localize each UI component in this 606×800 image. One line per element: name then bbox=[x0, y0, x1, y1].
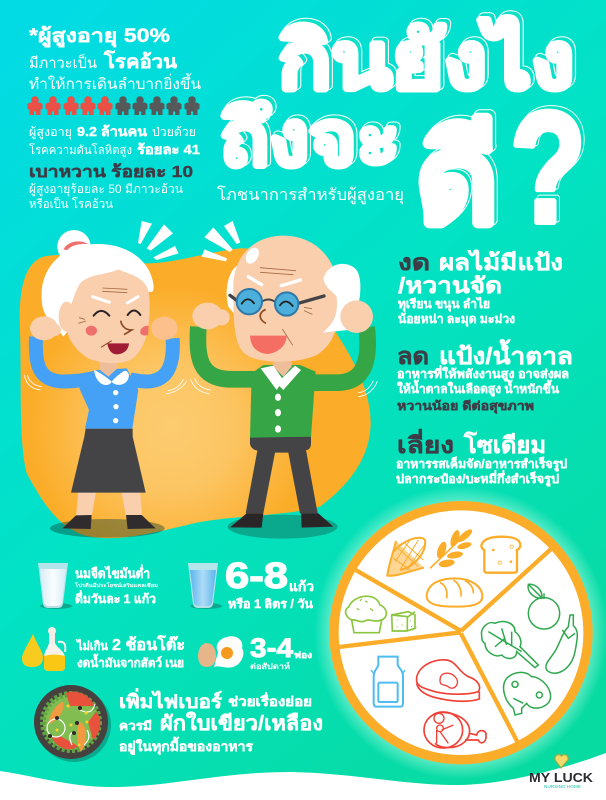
title: กินยังไง bbox=[278, 16, 574, 105]
milk text bbox=[74, 564, 158, 606]
icon: oil drop and bottle bbox=[22, 627, 65, 671]
fiber text: ควรมี bbox=[119, 719, 152, 733]
advice heading bbox=[397, 339, 573, 369]
fiber text bbox=[119, 688, 323, 755]
icons: grains bbox=[387, 527, 520, 607]
stat heading: *ผู้สูงอายุ 50% bbox=[29, 25, 170, 48]
oil text bbox=[75, 634, 185, 670]
hypertension text: ร้อยละ 41 bbox=[137, 142, 200, 157]
icon: salad bowl bbox=[34, 685, 111, 762]
explanation bbox=[396, 456, 567, 487]
water text bbox=[225, 555, 314, 611]
obesity line bbox=[29, 50, 177, 73]
title: ถึงจะ bbox=[220, 97, 400, 182]
advice heading: เลี่ยง bbox=[397, 428, 454, 458]
advice: avoid sodium bbox=[396, 428, 567, 487]
fiber text: อยู่ในทุกมื้อของอาหาร bbox=[119, 736, 253, 755]
illustration: elderly couple flexing bbox=[20, 221, 377, 539]
advice heading: แป้ง/น้ำตาล bbox=[439, 339, 573, 369]
title: ดี bbox=[419, 109, 501, 245]
water text: 6-8 bbox=[225, 555, 288, 596]
advice: reduce starch and sugar bbox=[397, 339, 573, 414]
burst lines bbox=[138, 221, 240, 261]
oil text: งดน้ำมันจากสัตว์ เนย bbox=[77, 653, 184, 670]
fruit list bbox=[398, 296, 515, 327]
egg text bbox=[250, 633, 312, 671]
title: กินยังไง bbox=[281, 13, 577, 102]
advice heading: ผลไม้มีแป้ง bbox=[439, 249, 563, 275]
advice: avoid starchy and sweet fruit bbox=[398, 249, 563, 327]
man bbox=[192, 236, 373, 539]
logo bbox=[529, 755, 594, 789]
advice heading: งด bbox=[398, 250, 430, 275]
fruit list: ทุเรียน ขนุน ลำไย bbox=[398, 296, 490, 312]
fiber text: ช่วยเรื่องย่อย bbox=[228, 692, 312, 709]
icons: sweets and tofu bbox=[346, 596, 417, 633]
woman bbox=[24, 230, 377, 538]
icon: milk glass bbox=[38, 563, 72, 609]
title: ดี bbox=[419, 109, 501, 245]
fruit list: น้อยหน่า ละมุด มะม่วง bbox=[398, 312, 515, 327]
icon: water glass bbox=[188, 563, 222, 609]
title: ถึงจะ bbox=[223, 94, 403, 179]
logo name: MY LUCK bbox=[529, 770, 594, 785]
advice heading bbox=[397, 428, 546, 458]
white wave footer bbox=[0, 753, 606, 800]
subtitle: โภชนาการสำหรับผู้สูงอายุ bbox=[217, 185, 404, 205]
food plate bbox=[314, 486, 606, 779]
advice heading bbox=[398, 249, 563, 298]
explanation: อาหารรสเค็มจัด/อาหารสำเร็จรูป bbox=[396, 456, 567, 472]
orange blob backdrop bbox=[20, 248, 371, 538]
logo heart icon bbox=[555, 755, 568, 768]
obesity note: หรือเป็น โรคอ้วน bbox=[29, 196, 113, 211]
icons: fruit and vegetables bbox=[481, 584, 577, 715]
obesity note: ผู้สูงอายุร้อยละ 50 มีภาวะอ้วน bbox=[29, 182, 183, 197]
hypertension text: ป่วยด้วย bbox=[152, 125, 196, 139]
oil text: ไม่เกิน bbox=[75, 638, 109, 653]
hypertension text: โรคความดันโลหิตสูง bbox=[29, 143, 132, 158]
title: ? bbox=[510, 80, 586, 256]
oil text: 2 ช้อนโต๊ะ bbox=[112, 634, 185, 654]
icons: proteins bbox=[371, 657, 405, 707]
logo tagline: NURSING HOME bbox=[544, 784, 581, 789]
advice heading: /หวานจัด bbox=[398, 273, 502, 298]
milk text: ดื่มวันละ 1 แก้ว bbox=[75, 590, 156, 606]
diabetes stat: เบาหวาน ร้อยละ 10 bbox=[29, 163, 193, 181]
explanation: หวานน้อย ดีต่อสุขภาพ bbox=[397, 399, 534, 414]
hypertension text: ผู้สูงอายุ bbox=[29, 125, 72, 140]
title bbox=[220, 13, 589, 256]
milk text: โปรตีนมีประโยชน์เสริมแคลเซียม bbox=[74, 582, 158, 589]
water text: แก้ว bbox=[289, 579, 314, 594]
explanation bbox=[397, 365, 569, 414]
obesity line: โรคอ้วน bbox=[103, 50, 177, 73]
title: ดี bbox=[416, 112, 498, 248]
walking difficulty line: ทำให้การเดินลำบากยิ่งขึ้น bbox=[29, 73, 201, 93]
obesity note bbox=[29, 182, 183, 211]
hypertension text bbox=[29, 124, 200, 158]
title: ถึงจะ bbox=[223, 94, 403, 179]
stats text block bbox=[28, 25, 201, 211]
pictogram: 5 of 10 elderly people bbox=[28, 96, 200, 115]
hypertension text: 9.2 ล้านคน bbox=[77, 124, 147, 139]
fiber text: เพิ่มไฟเบอร์ bbox=[119, 688, 223, 713]
icon: egg and fried egg bbox=[198, 636, 243, 668]
water text: หรือ 1 ลิตร / วัน bbox=[228, 597, 314, 611]
obesity line: มีภาวะเป็น bbox=[29, 53, 97, 72]
egg text: ต่อสัปดาห์ bbox=[250, 661, 290, 671]
milk text: นมจืดไขมันต่ำ bbox=[75, 564, 150, 581]
egg text: ฟอง bbox=[294, 650, 312, 660]
title: กินยังไง bbox=[281, 13, 577, 102]
egg text: 3-4 bbox=[250, 633, 293, 663]
explanation: อาหารที่ให้พลังงานสูง อาจส่งผล bbox=[397, 365, 569, 382]
explanation: ให้น้ำตาลในเลือดสูง น้ำหนักขึ้น bbox=[397, 379, 560, 397]
fiber text: ผักใบเขียว/เหลือง bbox=[160, 711, 323, 735]
advice heading: ลด bbox=[397, 343, 429, 369]
explanation: ปลากระป๋อง/บะหมี่กึ่งสำเร็จรูป bbox=[396, 470, 559, 487]
advice heading: โซเดียม bbox=[463, 431, 546, 458]
